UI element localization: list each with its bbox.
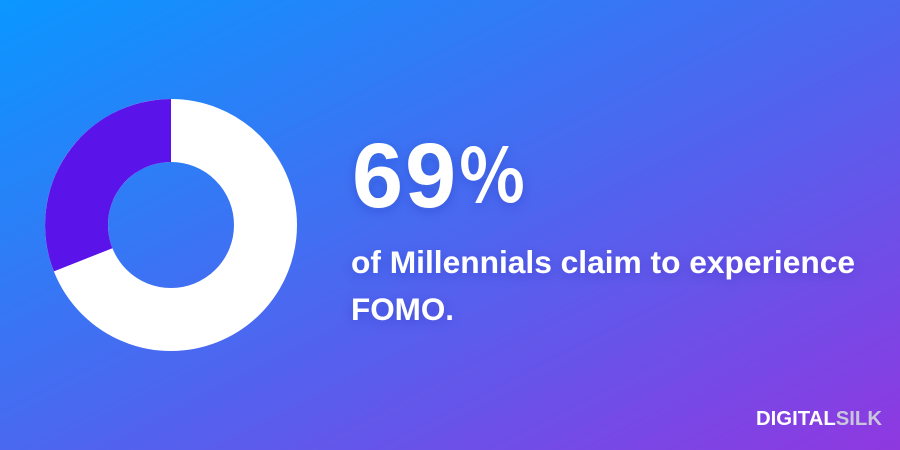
headline statistic: % <box>459 117 525 224</box>
logo: Digital Silk: DIGITALSILK <box>756 407 882 430</box>
headline statistic: 9 <box>405 125 456 227</box>
description text <box>351 244 855 327</box>
description text: of Millennials claim to experience <box>351 244 855 280</box>
headline statistic: 6 <box>352 125 403 227</box>
headline statistic <box>352 117 525 227</box>
description text: FOMO. <box>351 291 454 327</box>
donut chart: 69 percent <box>45 99 266 320</box>
